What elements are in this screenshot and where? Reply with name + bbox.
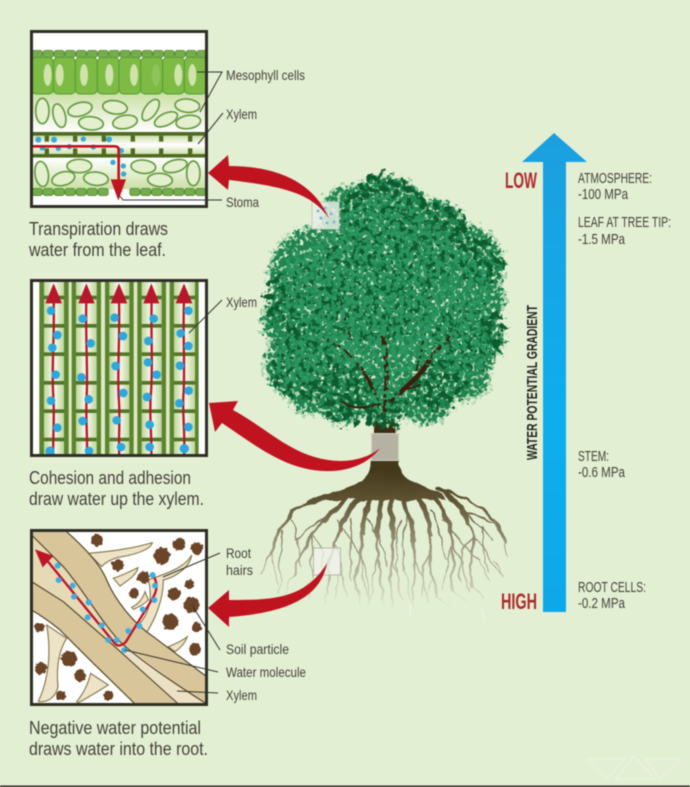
labels: leaf panel: Mesophyll cells (226, 67, 305, 83)
low label: LOW (505, 168, 537, 193)
value: root cells: -0.2 MPa (578, 596, 626, 612)
value: leaf at tree tip: -1.5 MPa (578, 232, 626, 248)
caption: transpiration (28, 219, 168, 260)
xylem tube background (68, 282, 170, 454)
mesophyll palisade cells (32, 57, 207, 94)
lower spongy layer (32, 158, 207, 189)
watermark (587, 756, 680, 779)
panel: cohesion and adhesion in xylem (30, 280, 207, 457)
value: leaf at tree tip (578, 215, 671, 248)
root body (32, 532, 207, 704)
canopy: dark green clusters (264, 173, 506, 432)
gradient axis title: WATER POTENTIAL GRADIENT (524, 305, 541, 460)
tree branches (323, 300, 463, 410)
gradient arrow (522, 133, 587, 612)
xylem vessel (32, 135, 207, 155)
inset marker: leaf sample (312, 202, 339, 229)
value: stem: STEM: (578, 449, 609, 465)
lower epidermis cells with stoma gap (32, 188, 109, 196)
water molecules (45, 306, 193, 456)
labels: leaf panel: Xylem (226, 106, 257, 122)
tree trunk (374, 403, 396, 437)
panel: negative water potential in the root (30, 530, 207, 707)
root highlights (410, 605, 484, 622)
tree canopy (261, 173, 506, 432)
labels: leaf panel: Stoma (226, 194, 259, 210)
labels: root panel: Xylem (226, 687, 257, 703)
caption: cohesion: Cohesion and adhesion (29, 468, 191, 488)
water molecules (35, 136, 126, 177)
caption: root: draws water into the root. (29, 739, 208, 759)
xylem tube walls (39, 280, 199, 457)
xylem channel (32, 538, 120, 648)
arrow: stem to xylem panel (209, 401, 380, 471)
labels: root panel: Root (226, 545, 251, 561)
upper epidermis cells (32, 50, 208, 58)
value: root cells (578, 580, 646, 612)
canopy: foliage over upper branches (274, 195, 492, 413)
canopy: mid green layer (263, 177, 504, 424)
red flow arrows (53, 300, 184, 457)
inset marker: stem sample (372, 434, 398, 460)
caption: transpiration: water from the leaf. (28, 240, 166, 260)
canopy: pale speckled layer (261, 175, 506, 425)
arrow: leaf to transpiration panel (208, 155, 329, 218)
upper spongy cells (36, 96, 201, 131)
caption: transpiration: Transpiration draws (29, 219, 168, 239)
caption: cohesion (29, 468, 204, 509)
labels: root panel: Soil particle (226, 641, 289, 657)
caption: root (29, 718, 208, 759)
high label: HIGH (501, 589, 537, 614)
value: stem (578, 449, 626, 481)
spongy layer background (32, 92, 207, 133)
value: atmosphere: -100 MPa (578, 187, 629, 203)
water flow arrow (35, 549, 157, 645)
water molecules (55, 563, 158, 653)
labels: root panel (125, 545, 306, 703)
caption: cohesion: draw water up the xylem. (29, 489, 204, 509)
caption: root: Negative water potential (29, 718, 201, 738)
root hairs (38, 543, 192, 703)
value: atmosphere: ATMOSPHERE: (578, 171, 652, 187)
water flow arrow (32, 146, 126, 201)
soil particles (34, 534, 203, 701)
tree roots (260, 453, 507, 613)
labels: root panel: hairs (226, 562, 253, 578)
panel: transpiration in the leaf (30, 30, 208, 207)
arrow: root sample to root panel (208, 563, 327, 627)
label: xylem (middle panel) (189, 294, 257, 333)
labels: leaf panel (119, 67, 305, 210)
value: stem: -0.6 MPa (578, 465, 626, 481)
labels: root panel: Water molecule (226, 664, 306, 680)
value: root cells: ROOT CELLS: (578, 580, 646, 596)
inset marker: root sample (314, 548, 340, 575)
label: xylem (middle panel): Xylem (226, 294, 257, 310)
value: atmosphere (578, 171, 652, 203)
